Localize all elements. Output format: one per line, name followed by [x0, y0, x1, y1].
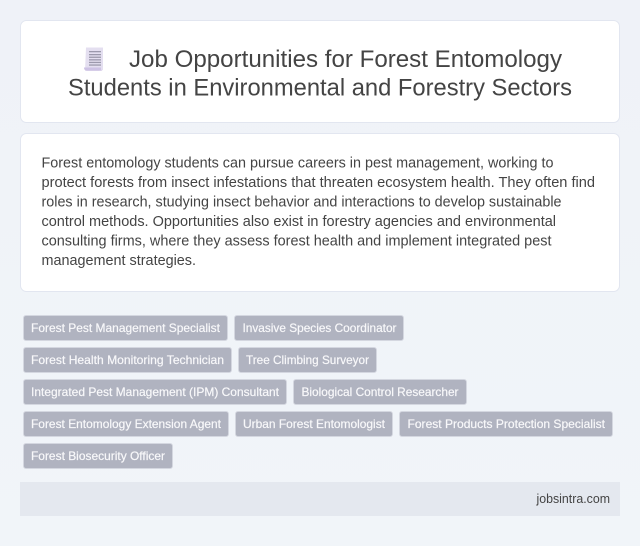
- text block: description: consulting firms, where they assess forest health and implement integrated pest: [42, 234, 552, 250]
- tag: [24, 380, 286, 404]
- text block: description: [42, 156, 595, 269]
- tag: [234, 316, 404, 340]
- job tags: [24, 316, 612, 468]
- title: Job Opportunities for Forest Entomology: [129, 46, 562, 73]
- panel: description: [20, 134, 620, 292]
- text block: description: protect forests from insect infestations that threaten ecosystem health. They often find: [42, 175, 595, 191]
- tag: [294, 380, 466, 404]
- tag: Forest Products Protection Specialist: [408, 417, 606, 431]
- tag: Urban Forest Entomologist: [243, 417, 386, 431]
- title: Students in Environmental and Forestry Sectors: [68, 74, 572, 102]
- tag: [24, 316, 228, 340]
- tag: [400, 412, 612, 436]
- tag: Forest Pest Management Specialist: [31, 321, 221, 335]
- text block: description: Forest entomology students can pursue careers in pest management, working to: [42, 156, 554, 172]
- tag: Integrated Pest Management (IPM) Consultant: [31, 385, 280, 399]
- tag: [24, 444, 172, 468]
- footer source text: jobsintra.com: [536, 492, 610, 506]
- tag: Tree Climbing Surveyor: [246, 353, 369, 367]
- footer: [20, 482, 620, 516]
- text block: description: roles in research, studying insect behavior and interactions to develop sustainable: [42, 195, 562, 211]
- tag: Forest Health Monitoring Technician: [31, 353, 224, 367]
- tag: Forest Entomology Extension Agent: [31, 417, 222, 431]
- tag: [24, 412, 228, 436]
- icon: document scroll: [84, 48, 103, 71]
- tag: Forest Biosecurity Officer: [31, 449, 165, 463]
- text block: description: control methods. Opportunities also exist in forestry agencies and environmental: [42, 214, 556, 230]
- text block: description: management strategies.: [42, 253, 196, 269]
- panel: title card: [20, 20, 620, 122]
- tag: Invasive Species Coordinator: [242, 321, 396, 335]
- tag: [238, 348, 376, 372]
- tag: [24, 348, 232, 372]
- tag: Biological Control Researcher: [302, 385, 458, 399]
- title: [68, 46, 572, 102]
- tag: [236, 412, 392, 436]
